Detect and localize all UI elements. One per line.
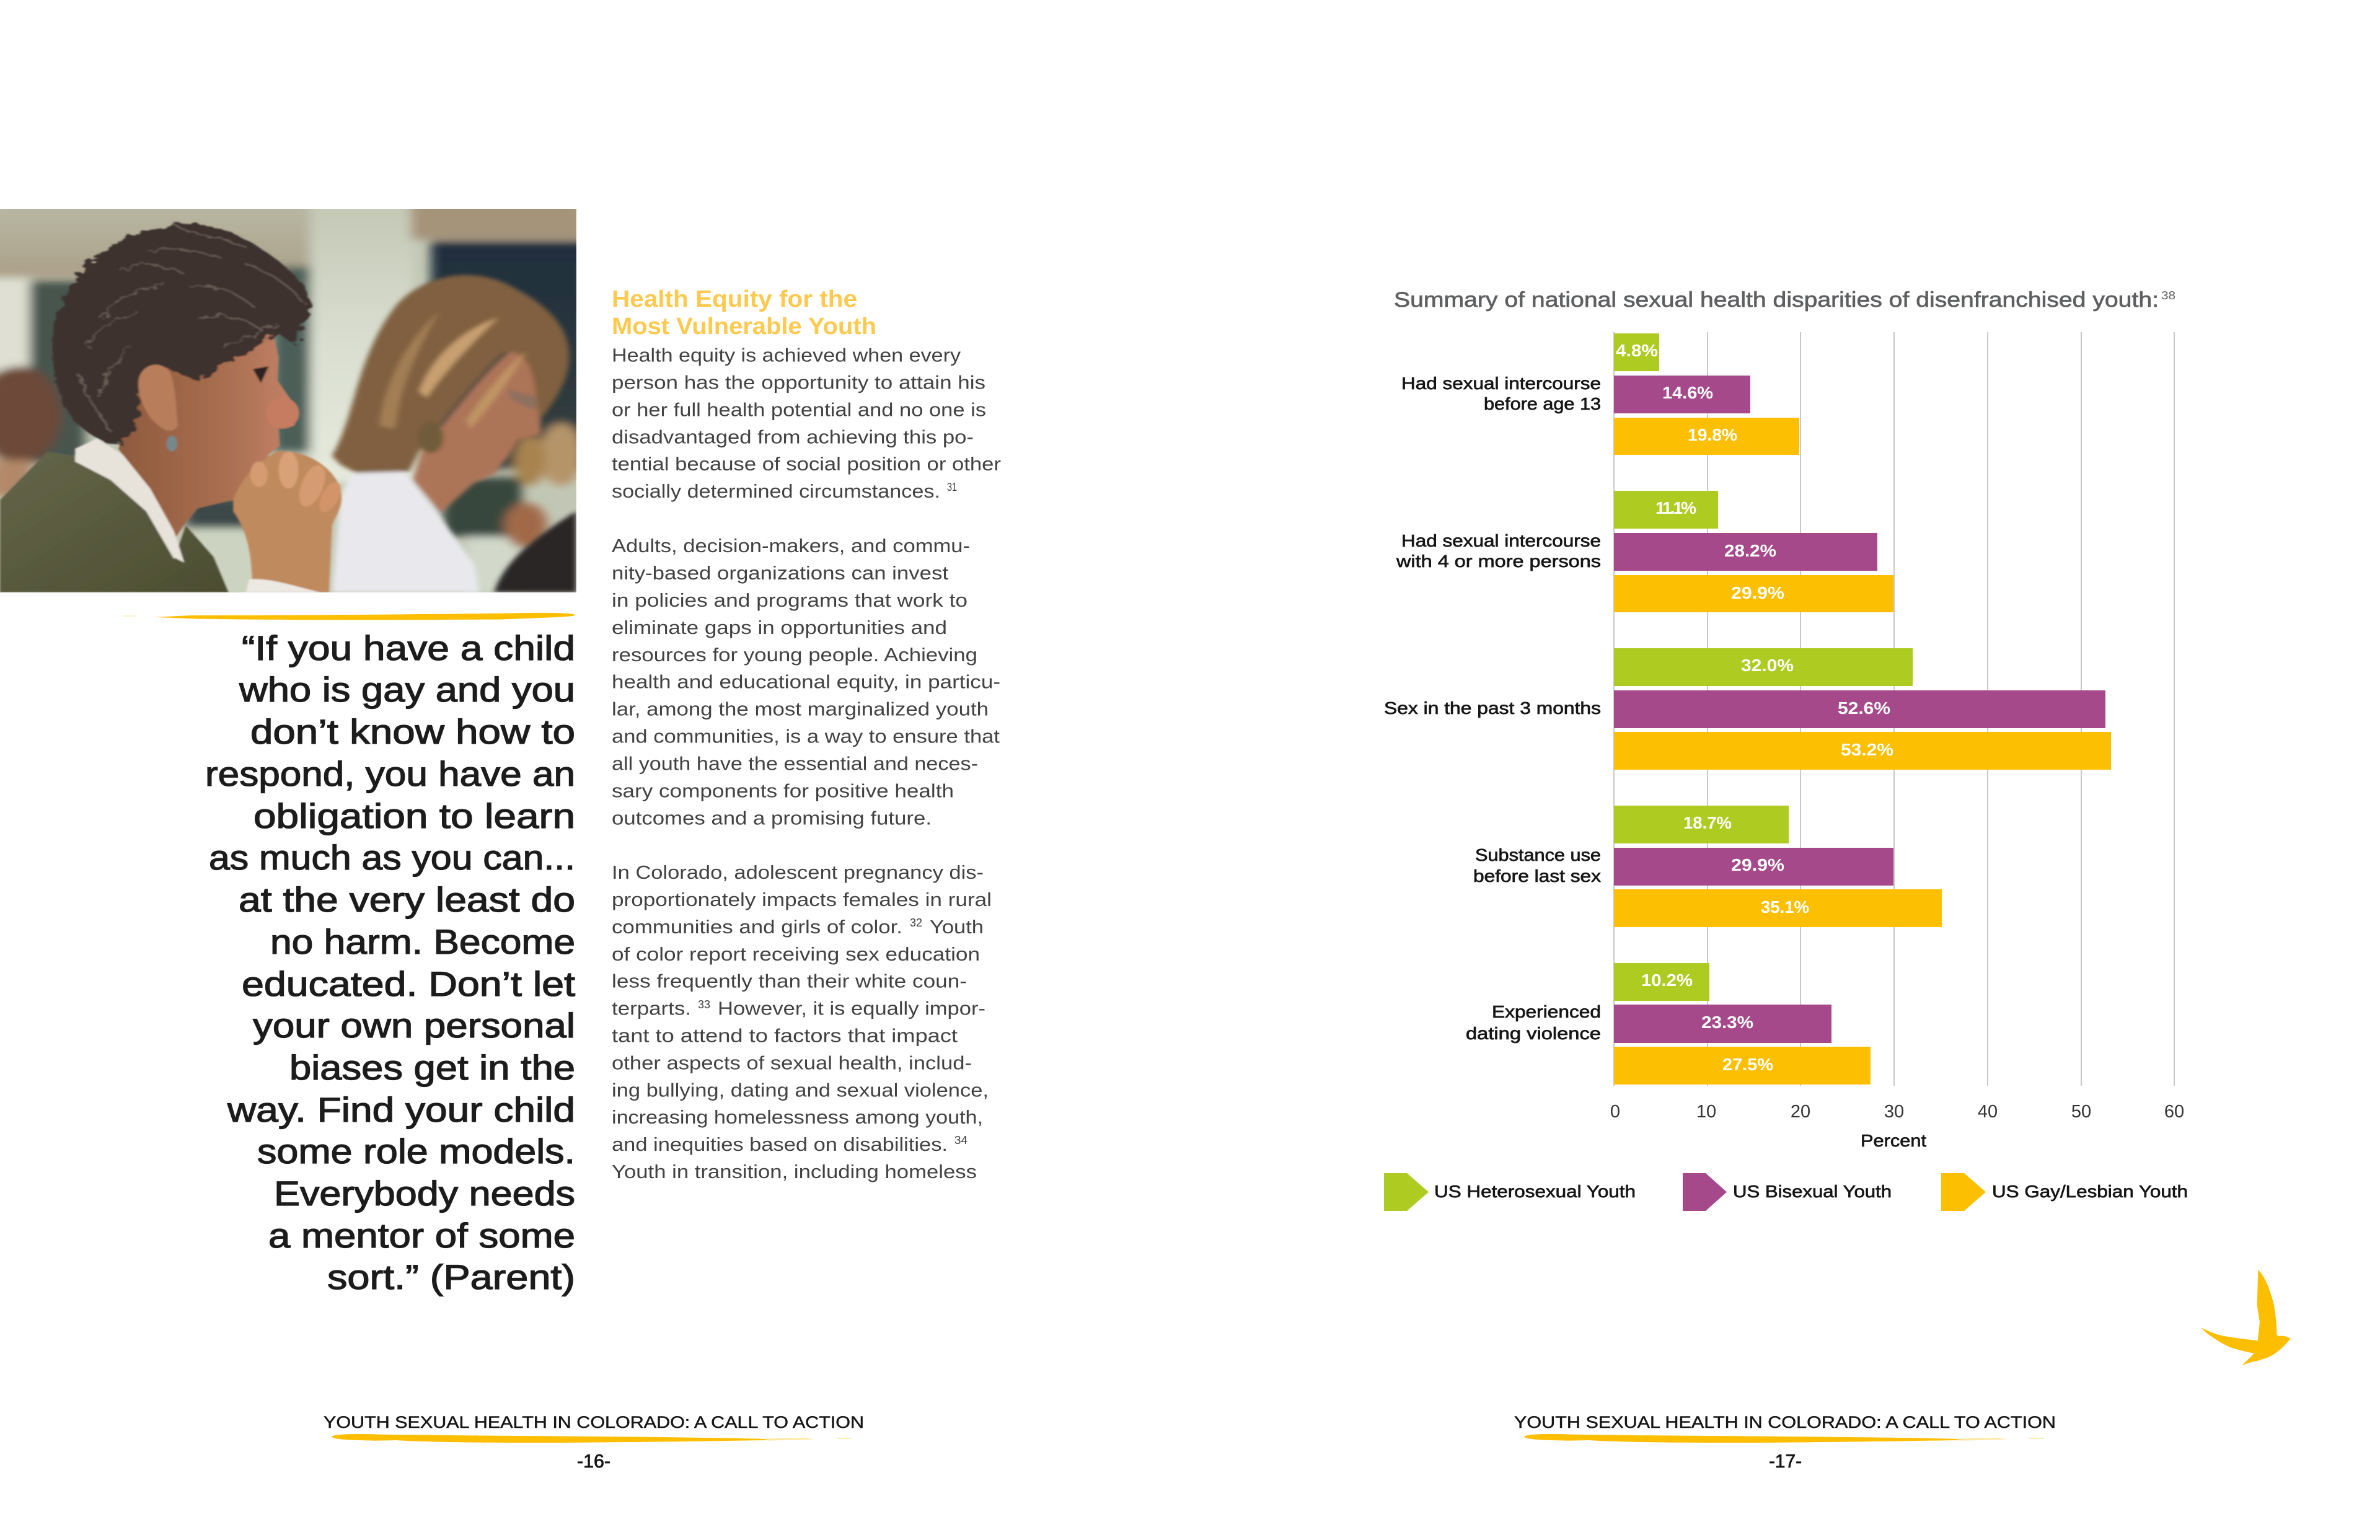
bars: substance use: 29.9% (1731, 855, 1784, 874)
bars: substance use: 18.7% (1683, 813, 1732, 832)
pull quote: obligation to learn (253, 796, 575, 835)
legend: bisexual: US Bisexual Youth (1733, 1182, 1892, 1201)
body text column: terparts. (612, 998, 691, 1019)
category labels: Had sexual intercourse (1401, 374, 1601, 393)
dark jacket, far right (494, 511, 576, 592)
bars: dating violence: 10.2% (1641, 970, 1693, 990)
x-axis tick labels: 0 (1610, 1102, 1620, 1122)
category labels: Sex in the past 3 months (1384, 698, 1601, 718)
pull quote: “If you have a child (242, 628, 575, 667)
legend: gay/lesbian (1941, 1173, 2188, 1211)
body text column: disadvantaged from achieving this po- (612, 426, 974, 447)
body text column: in policies and programs that work to (612, 589, 967, 611)
first woman (0, 223, 345, 592)
body text column: and communities, is a way to ensure that (612, 725, 1000, 747)
body text column: Adults, decision-makers, and commu- (612, 535, 970, 557)
bars: before age 13 (1614, 333, 1799, 455)
bars: dating violence (1614, 963, 1871, 1085)
pull quote: a mentor of some (268, 1216, 575, 1255)
legend: heterosexual: US Heterosexual Youth (1434, 1182, 1636, 1201)
body text column: less frequently than their white coun- (612, 970, 967, 992)
pull quote: way. Find your child (227, 1090, 575, 1129)
x-axis tick labels (1610, 1102, 2184, 1122)
body text column: 33 (698, 998, 710, 1011)
pull quote (205, 628, 575, 1296)
pull quote: sort.” (Parent) (327, 1257, 575, 1296)
body text column: Youth in transition, including homeless (612, 1161, 977, 1182)
pull quote: who is gay and you (239, 670, 575, 709)
photo: two women listening (0, 198, 589, 597)
bar chart (1384, 332, 2184, 1150)
body text column: all youth have the essential and neces- (612, 752, 978, 774)
bars: past 3 months (1614, 648, 2111, 770)
legend: heterosexual (1384, 1173, 1636, 1211)
body text column (612, 345, 1001, 1182)
body text column: socially determined circumstances. (612, 480, 940, 502)
footer: left page: -16- (577, 1450, 610, 1472)
pull quote: some role models. (257, 1132, 575, 1171)
body text column: proportionately impacts females in rural (612, 889, 992, 910)
category labels: Had sexual intercourse (1401, 531, 1601, 550)
x-axis tick labels: 30 (1884, 1102, 1904, 1122)
body text column: increasing homelessness among youth, (612, 1106, 983, 1128)
bars: 4 or more persons (1614, 491, 1893, 612)
pull quote: biases get in the (289, 1048, 575, 1087)
category labels: dating violence (1466, 1024, 1601, 1043)
body text column: 32 (910, 917, 922, 929)
pull quote: educated. Don’t let (242, 964, 575, 1003)
bars: 4 or more persons: 29.9% (1731, 583, 1784, 602)
x-axis title: Percent (1861, 1131, 1926, 1150)
body text column: tant to attend to factors that impact (612, 1024, 958, 1046)
legend: gay/lesbian: US Gay/Lesbian Youth (1992, 1182, 2188, 1201)
bars: past 3 months: 52.6% (1838, 698, 1890, 718)
icon: bird (2202, 1270, 2291, 1365)
body text column: 34 (954, 1134, 967, 1146)
pull quote: don’t know how to (250, 712, 575, 751)
category labels: before last sex (1473, 866, 1601, 886)
x-axis tick labels: 50 (2071, 1102, 2091, 1122)
category labels: before age 13 (1484, 394, 1601, 413)
chart title: Summary of national sexual health disparities of disenfranchised youth: (1394, 288, 2159, 312)
category labels: Substance use (1475, 845, 1601, 865)
category labels: Experienced (1492, 1002, 1601, 1021)
pull quote: your own personal (253, 1006, 575, 1045)
footer: right page: YOUTH SEXUAL HEALTH IN COLORADO: A CALL TO ACTION (1514, 1413, 2056, 1432)
bars: 4 or more persons: 11.1% (1655, 498, 1696, 517)
body text column: person has the opportunity to attain his (612, 371, 985, 393)
body text column: Youth (930, 916, 984, 938)
body text column: ing bullying, dating and sexual violence, (612, 1079, 989, 1101)
body text column: and inequities based on disabilities. (612, 1133, 948, 1155)
brush stroke under photo (123, 613, 575, 620)
second woman (332, 275, 569, 592)
body text column: eliminate gaps in opportunities and (612, 617, 947, 638)
body text column: or her full health potential and no one is (612, 398, 986, 420)
x-axis tick labels: 40 (1978, 1102, 1998, 1122)
body text column: tential because of social position or other (612, 453, 1001, 475)
footer: left page: YOUTH SEXUAL HEALTH IN COLORADO: A CALL TO ACTION (324, 1413, 864, 1432)
body text column: 31 (947, 481, 957, 493)
bars: past 3 months: 53.2% (1841, 740, 1893, 759)
body text column: of color report receiving sex education (612, 943, 980, 965)
body text column: However, it is equally impor- (718, 998, 985, 1019)
chart title: 38 (2161, 289, 2175, 302)
body text column: resources for young people. Achieving (612, 644, 977, 666)
category labels (1384, 374, 1601, 1043)
heading: Health Equity (612, 286, 876, 340)
bars: substance use (1614, 806, 1942, 927)
heading: Health Equity: Health Equity for the (612, 286, 857, 312)
body text column: nity-based organizations can invest (612, 562, 948, 584)
footer: right page (1514, 1413, 2056, 1472)
body text column: Health equity is achieved when every (612, 345, 961, 366)
pull quote: Everybody needs (274, 1174, 575, 1213)
legend: bisexual (1683, 1173, 1892, 1211)
body text column: outcomes and a promising future. (612, 807, 932, 829)
bars: past 3 months: 32.0% (1741, 656, 1794, 675)
bars: 4 or more persons: 28.2% (1724, 541, 1776, 560)
x-axis tick labels: 60 (2164, 1102, 2184, 1122)
bars: substance use: 35.1% (1761, 897, 1809, 917)
footer: right page: -17- (1769, 1450, 1802, 1472)
bars: dating violence: 27.5% (1722, 1055, 1773, 1074)
body text column: lar, among the most marginalized youth (612, 698, 989, 720)
x-axis tick labels: 10 (1696, 1102, 1716, 1122)
bars: before age 13: 19.8% (1688, 425, 1737, 444)
legend (1384, 1173, 2188, 1211)
footer: left page (324, 1413, 864, 1472)
heading: Health Equity: Most Vulnerable Youth (612, 314, 876, 340)
pull quote: no harm. Become (270, 922, 575, 961)
bars: dating violence: 23.3% (1701, 1013, 1753, 1032)
body text column: health and educational equity, in particu- (612, 671, 1000, 693)
pull quote: as much as you can... (209, 838, 575, 877)
pull quote: respond, you have an (205, 754, 575, 793)
bars: before age 13: 4.8% (1616, 341, 1658, 360)
bars: before age 13: 14.6% (1662, 383, 1713, 402)
body text column: communities and girls of color. (612, 916, 902, 938)
x-axis tick labels: 20 (1791, 1102, 1810, 1122)
body text column: other aspects of sexual health, includ- (612, 1052, 972, 1073)
body text column: In Colorado, adolescent pregnancy dis- (612, 861, 984, 883)
category labels: with 4 or more persons (1396, 552, 1601, 571)
body text column: sary components for positive health (612, 780, 954, 801)
pull quote: at the very least do (239, 880, 575, 919)
